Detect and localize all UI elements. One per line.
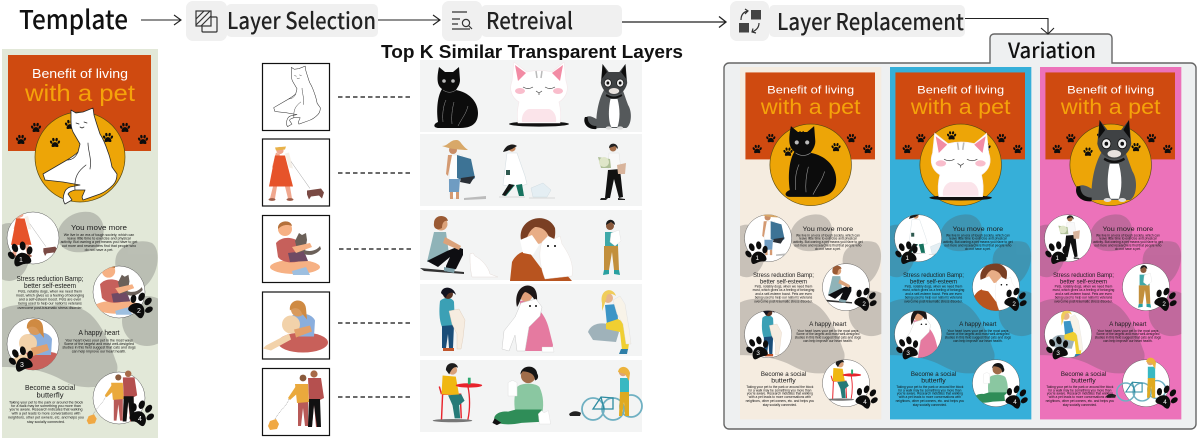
variation poster: cream: Your heart loves your pet in the most ways <box>797 329 859 333</box>
variation poster: pink: out more and researchers find that people who <box>1094 243 1162 247</box>
item: a happy heart: A happy heart <box>78 328 120 337</box>
variation poster: blue: for a walk may be something you more than <box>898 388 962 392</box>
variation poster: pink: Stress reduction Bamp; <box>1053 272 1114 279</box>
variation poster: cream: for a walk may be something you more than <box>748 388 812 392</box>
variation poster: pink: you're aware. Research indicates that walking <box>1047 392 1113 396</box>
variation poster: blue: 4 <box>1013 399 1017 406</box>
variation poster: pink: with a pet leads to more conversations with <box>1049 395 1111 399</box>
item: become a social butterfly: 4 <box>138 416 142 423</box>
variation poster: pink: most, which gives us a feeling of belonging <box>1053 288 1115 292</box>
item: a happy heart: can help improve our heart health. <box>72 350 126 354</box>
variation poster: blue: better self-esteem <box>910 279 957 286</box>
variation poster: pink: 1 <box>1055 255 1059 262</box>
item: become a social butterfly: with a pet leads to more conversations with <box>12 412 80 416</box>
variation poster: blue: studies in this field suggest that cats and dogs <box>945 335 1011 339</box>
item: stress reduction: being used to help our nation's veterans <box>18 302 82 306</box>
variation poster: cream: A happy heart <box>809 321 847 328</box>
variation poster: blue: with a pet leads to more conversations with <box>899 395 961 399</box>
variation poster: pink: overcome post-traumatic stress disorder. <box>1054 300 1113 304</box>
item: become a social butterfly: Become a social <box>25 383 75 392</box>
item: a happy heart: Some of the largest and most well-designed <box>64 342 134 346</box>
variation poster: blue: Pets, notably dogs, when we need them <box>905 285 963 289</box>
variation poster: blue: leave little time to exercise and physical <box>949 237 1007 241</box>
retrieved row 2 <box>420 134 642 206</box>
item: become a social butterfly: Taking your pet to the park or around the block <box>9 400 83 404</box>
arrow: template to layer selection <box>141 15 181 25</box>
heading: variation: Variation <box>1007 35 1096 65</box>
retrieved row 3 <box>420 210 642 281</box>
item: become a social butterfly: you're aware. Research indicates that walking <box>10 408 82 412</box>
variation poster: cream: Pets, notably dogs, when we need them <box>755 285 813 289</box>
item: you move more: We live in an era of tough society, which can <box>64 233 134 237</box>
item: stress reduction: and a self-esteem boost. Pets are even <box>19 298 81 302</box>
variation poster: cream: 1 <box>755 255 759 262</box>
variation poster: blue: do not have a pet. <box>965 247 991 251</box>
thumbnail: cat layer <box>262 64 330 130</box>
item: stress reduction: most, which gives us a feeling of belonging <box>16 294 84 298</box>
variation poster: blue: 2 <box>1012 301 1016 308</box>
variation poster: blue: You move more <box>953 226 1003 233</box>
item: become a social butterfly: stay socially connected. <box>27 420 65 424</box>
variation poster: cream: with a pet <box>760 96 861 119</box>
item: become a social butterfly <box>8 371 160 430</box>
item: you move more: activity. But owning a pet means you have to get <box>61 240 137 244</box>
item: you move more: 1 <box>19 257 23 264</box>
variation poster: pink: leave little time to exercise and physical <box>1099 237 1157 241</box>
thumbnail: walker layer <box>262 139 330 206</box>
variation poster: pink: being used to help our nation's veterans <box>1055 295 1113 299</box>
variation poster: cream: butterfly <box>771 378 796 385</box>
chip: retrieval <box>442 1 622 41</box>
chip: retrieval: Retreival <box>486 2 573 36</box>
variation poster: cream: You move more <box>803 226 853 233</box>
variation poster: cream: being used to help our nation's veterans <box>755 295 813 299</box>
variation poster: blue: overcome post-traumatic stress disorder. <box>904 300 963 304</box>
variation poster: cream: better self-esteem <box>760 279 807 286</box>
variation poster: blue: Benefit of living <box>917 84 1004 96</box>
poster title <box>24 67 136 106</box>
variation poster: pink: and a self-esteem boost. Pets are even <box>1055 292 1112 296</box>
white cat <box>43 108 117 204</box>
arrow: selection to retrieval <box>378 15 440 25</box>
variation poster: cream: you're aware. Research indicates that walking <box>747 392 813 396</box>
variation poster: blue: We live in an era of tough society, which can <box>946 233 1010 237</box>
item: a happy heart <box>0 318 136 374</box>
item: a happy heart: Your heart loves your pet in the most ways <box>65 338 133 342</box>
variation poster: cream: Stress reduction Bamp; <box>753 272 814 279</box>
panel: variation <box>724 34 1196 429</box>
item: a happy heart: studies in this field suggest that cats and dogs <box>62 346 136 350</box>
variation poster: blue: and a self-esteem boost. Pets are even <box>905 292 962 296</box>
item: stress reduction: Pets, notably dogs, when we need them <box>18 290 82 294</box>
variation poster: blue: being used to help our nation's veterans <box>905 295 963 299</box>
chip: layer replacement: Layer Replacement <box>777 3 964 37</box>
variation poster: blue <box>890 67 1032 420</box>
variation poster: pink: Taking your pet to the park or around the block <box>1046 385 1114 389</box>
variation poster: cream: We live in an era of tough society, which can <box>796 233 860 237</box>
variation poster: cream: can help improve our heart health. <box>803 339 853 343</box>
variation poster: cream: 4 <box>863 399 867 406</box>
variation poster: blue: Become a social <box>911 371 957 378</box>
variation poster: pink: butterfly <box>1071 378 1096 385</box>
variation poster: cream: Benefit of living <box>767 84 854 96</box>
item: a happy heart: 3 <box>20 362 24 369</box>
variation poster: blue: you're aware. Research indicates that walking <box>897 392 963 396</box>
variation poster: blue: Stress reduction Bamp; <box>903 272 964 279</box>
variation poster: pink: with a pet <box>1060 96 1161 119</box>
item: you move more: out more and researchers find that people who <box>62 244 136 248</box>
variation poster: cream: most, which gives us a feeling of belonging <box>753 288 815 292</box>
variation poster: blue: A happy heart <box>959 321 997 328</box>
variation poster: pink: 4 <box>1163 399 1167 406</box>
icon: swap squares <box>739 9 761 33</box>
item: stress reduction: overcome post-traumatic stress disorder. <box>18 306 82 310</box>
variation poster: blue: Your heart loves your pet in the most ways <box>947 329 1009 333</box>
variation poster: pink: better self-esteem <box>1060 279 1107 286</box>
variation poster: blue: 1 <box>905 255 909 262</box>
variation poster: blue: out more and researchers find that people who <box>944 243 1012 247</box>
item: become a social butterfly: neighbors, other pet owners, etc. and helps you <box>8 416 84 420</box>
variation poster: cream: leave little time to exercise and physical <box>799 237 857 241</box>
variation poster: cream: out more and researchers find that people who <box>794 243 862 247</box>
variation poster: pink: 2 <box>1162 301 1166 308</box>
variation poster: pink: Become a social <box>1061 371 1107 378</box>
variation poster: pink: can help improve our heart health. <box>1103 339 1153 343</box>
chip: layer selection: Layer Selection <box>227 2 376 36</box>
item: you move more: You move more <box>71 223 127 232</box>
heading: top k: Top K Similar Transparent Layers <box>381 41 683 62</box>
variation poster: cream: neighbors, other pet owners, etc. and helps you <box>746 399 814 403</box>
variation poster: cream: stay socially connected. <box>763 403 797 407</box>
chip: layer selection <box>186 1 378 41</box>
variation poster: cream: and a self-esteem boost. Pets are even <box>755 292 812 296</box>
variation poster: cream: overcome post-traumatic stress disorder. <box>754 300 813 304</box>
orange disc <box>35 112 125 202</box>
variation poster: pink: Pets, notably dogs, when we need them <box>1055 285 1113 289</box>
variation poster: pink: A happy heart <box>1109 321 1147 328</box>
retrieved row 5 <box>420 360 642 432</box>
variation poster: pink <box>1040 67 1182 420</box>
retrieved row 4 <box>420 284 642 356</box>
icon: list search <box>452 12 472 29</box>
paw background shapes <box>0 212 172 387</box>
variation poster: pink: Benefit of living <box>1067 84 1154 96</box>
variation poster: cream <box>740 67 882 420</box>
variation poster: cream: with a pet leads to more conversations with <box>749 395 811 399</box>
header block <box>8 55 151 151</box>
variation poster: cream: Taking your pet to the park or around the block <box>746 385 814 389</box>
variation poster: pink: Some of the largest and most well-designed <box>1096 332 1160 336</box>
variation poster: blue: Taking your pet to the park or around the block <box>896 385 964 389</box>
variation poster: cream: 2 <box>862 301 866 308</box>
variation poster: blue: neighbors, other pet owners, etc. and helps you <box>896 399 964 403</box>
thumbnail: couple layer <box>262 368 330 436</box>
item: stress reduction: Stress reduction Bamp; <box>16 274 84 283</box>
variation poster: cream: 3 <box>756 350 760 357</box>
variation poster: pink: 3 <box>1056 350 1060 357</box>
poster title: Benefit of living <box>32 67 128 81</box>
variation poster: pink: You move more <box>1103 226 1153 233</box>
poster title: with a pet <box>24 80 136 106</box>
variation poster: pink: studies in this field suggest that cats and dogs <box>1095 335 1161 339</box>
variation poster: pink: stay socially connected. <box>1063 403 1097 407</box>
item: stress reduction: 2 <box>137 308 141 315</box>
variation poster: blue: 3 <box>906 350 910 357</box>
variation poster: pink: Your heart loves your pet in the most ways <box>1097 329 1159 333</box>
item: stress reduction <box>16 266 153 318</box>
variation poster: cream: do not have a pet. <box>815 247 841 251</box>
icon: layers <box>196 11 217 32</box>
variation poster: pink: We live in an era of tough society, which can <box>1096 233 1160 237</box>
item: become a social butterfly: butterfly <box>36 390 64 400</box>
variation poster: pink: neighbors, other pet owners, etc. and helps you <box>1046 399 1114 403</box>
thumbnail: boy layer <box>262 216 330 282</box>
heading: template: Template <box>19 0 128 37</box>
item: become a social butterfly: for a walk may be something you more than <box>11 404 81 408</box>
variation poster: blue: with a pet <box>910 96 1011 119</box>
variation poster: cream: Some of the largest and most well-designed <box>796 332 860 336</box>
variation poster: pink: do not have a pet. <box>1115 247 1141 251</box>
variation poster: cream: activity. But owning a pet means you have to get <box>793 240 863 244</box>
variation poster: blue: activity. But owning a pet means you have to get <box>943 240 1013 244</box>
retrieved row 1 <box>420 60 642 132</box>
variation poster: blue: Some of the largest and most well-designed <box>946 332 1010 336</box>
header paws <box>15 120 149 147</box>
variation poster: pink: for a walk may be something you more than <box>1048 388 1112 392</box>
variation poster: cream: Become a social <box>761 371 807 378</box>
chip: layer replacement <box>730 1 965 41</box>
thumbnail: girl layer <box>262 292 330 359</box>
item: you move more: do not have a pet. <box>85 248 113 252</box>
variation poster: blue: butterfly <box>921 378 946 385</box>
variation poster: blue: stay socially connected. <box>913 403 947 407</box>
item: stress reduction: better self-esteem <box>24 281 76 290</box>
arrow: replacement to variation <box>965 18 1054 34</box>
item: you move more: leave little time to exercise and physical <box>67 236 131 240</box>
variation poster: blue: can help improve our heart health. <box>953 339 1003 343</box>
template poster <box>0 49 172 438</box>
item: you move more <box>4 211 137 268</box>
variation poster: cream: studies in this field suggest that cats and dogs <box>795 335 861 339</box>
variation poster: pink: activity. But owning a pet means you have to get <box>1093 240 1163 244</box>
arrow: retrieval to replacement <box>622 16 726 28</box>
variation poster: blue: most, which gives us a feeling of belonging <box>903 288 965 292</box>
dashed connectors <box>338 97 413 397</box>
